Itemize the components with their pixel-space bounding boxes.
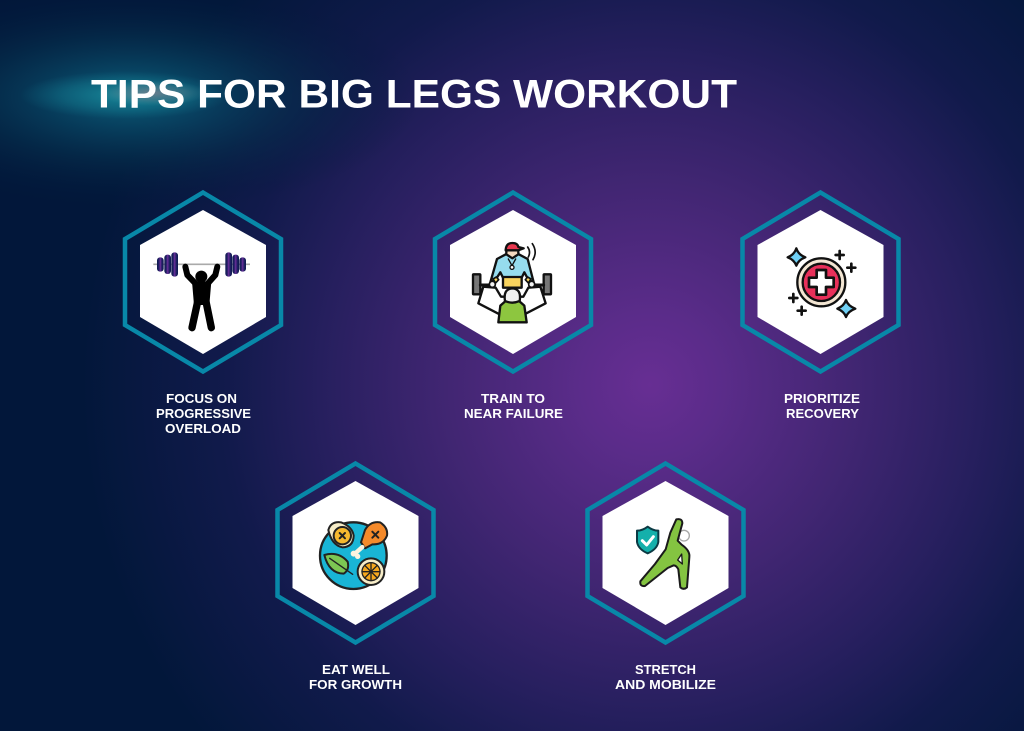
label: FOR GROWTH bbox=[309, 678, 402, 692]
label: OVERLOAD bbox=[165, 422, 241, 436]
label: AND MOBILIZE bbox=[615, 678, 716, 692]
title: TIPS FOR BIG LEGS WORKOUT bbox=[91, 72, 737, 116]
label: EAT WELL bbox=[322, 663, 390, 677]
label bbox=[784, 392, 860, 421]
label: TRAIN TO bbox=[481, 392, 545, 406]
icon: plate of healthy food bbox=[320, 522, 387, 589]
label: NEAR FAILURE bbox=[464, 407, 563, 421]
icon: weightlifter bbox=[153, 252, 250, 328]
hexagon frame bbox=[435, 192, 591, 372]
panel: eat well for growth bbox=[278, 464, 434, 692]
label: PRIORITIZE bbox=[784, 392, 860, 406]
panel: focus on progressive overload bbox=[125, 192, 281, 436]
hexagon frame bbox=[588, 464, 744, 642]
label: STRETCH bbox=[635, 663, 696, 677]
icon: coach spotting lifter bbox=[473, 243, 551, 322]
hexagon frame bbox=[278, 464, 434, 642]
label: PROGRESSIVE bbox=[156, 407, 251, 421]
label: FOCUS ON bbox=[166, 392, 237, 406]
label bbox=[464, 392, 563, 421]
icon: stretching figure with shield bbox=[637, 519, 689, 589]
panel: prioritize recovery bbox=[742, 192, 898, 421]
label bbox=[156, 392, 251, 436]
icon: medical cross with sparkles bbox=[788, 248, 855, 317]
label bbox=[615, 663, 716, 692]
label: RECOVERY bbox=[786, 407, 860, 421]
panel: stretch and mobilize bbox=[588, 464, 744, 692]
hexagon frame bbox=[125, 192, 281, 372]
label bbox=[309, 663, 402, 692]
panel: train to near failure bbox=[435, 192, 591, 421]
hexagon frame bbox=[742, 192, 898, 372]
